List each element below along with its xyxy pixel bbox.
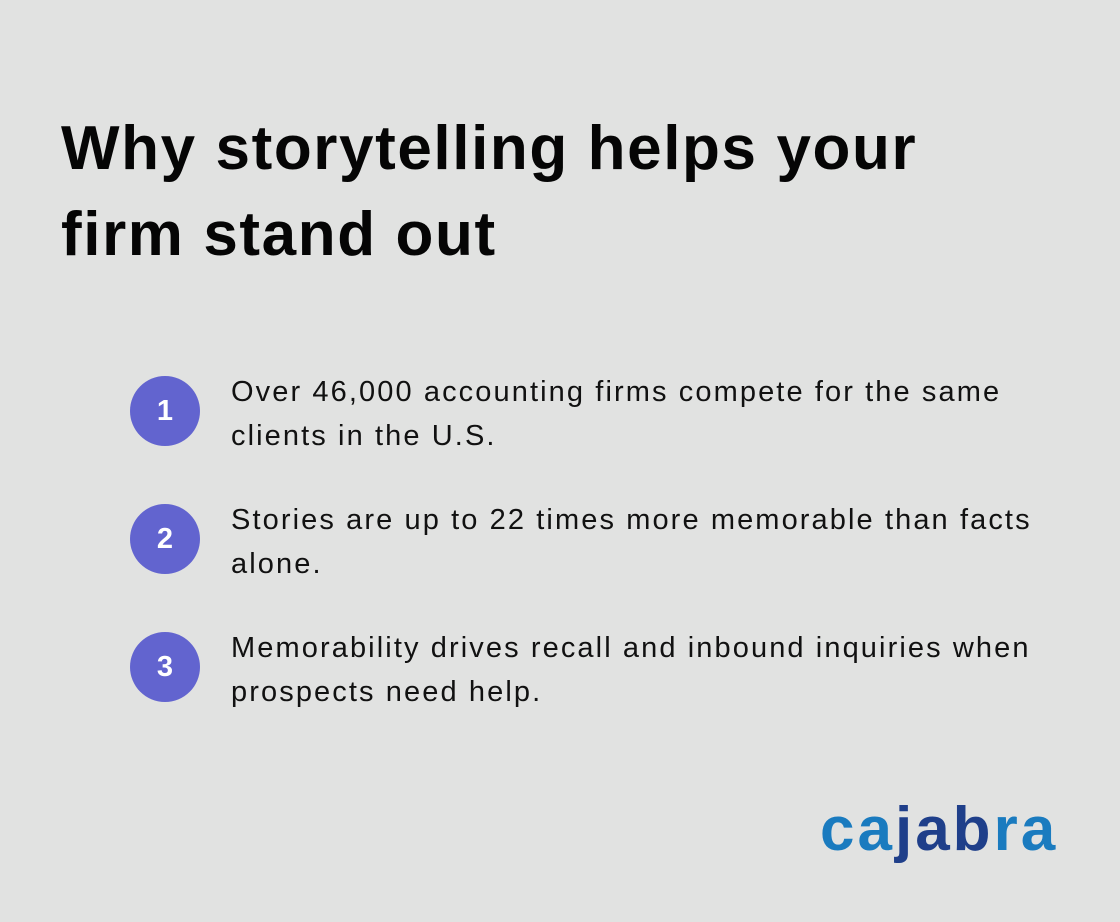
title [61,114,917,269]
text 1: clients in the U.S. [231,420,497,452]
item 2 [130,504,1032,580]
icon: number 1 [130,376,200,446]
text 2: Stories are up to 22 times more memorable than facts [231,504,1032,536]
item 3 [130,632,1031,708]
item 1 [130,376,1001,452]
title: Why storytelling helps your [61,114,917,183]
text 1 [231,376,1001,452]
icon: number 2: 2 [157,523,173,555]
text 3: Memorability drives recall and inbound inquiries when [231,632,1031,664]
logo: cajabra [820,795,1058,864]
text 2: alone. [231,548,323,580]
icon: number 3 [130,632,200,702]
text 3 [231,632,1031,708]
icon: number 2 [130,504,200,574]
text 3: prospects need help. [231,676,542,708]
icon: number 3: 3 [157,651,173,683]
icon: number 1: 1 [157,395,173,427]
title: firm stand out [61,200,497,269]
text 2 [231,504,1032,580]
text 1: Over 46,000 accounting firms compete for the same [231,376,1001,408]
